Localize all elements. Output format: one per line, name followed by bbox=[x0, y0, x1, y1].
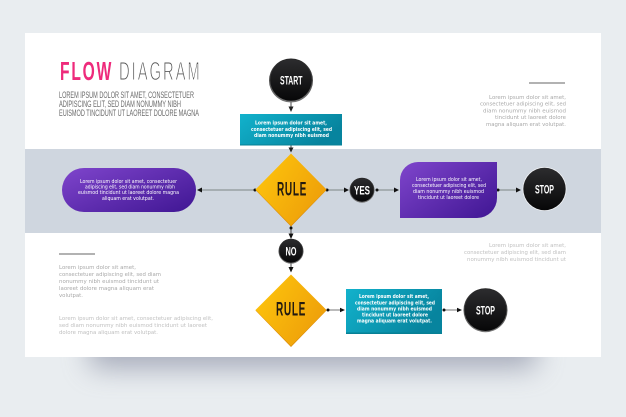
right top note bbox=[480, 82, 567, 128]
left lower note 2: sed diam nonummy nibh euismod tincidunt ut laoreet bbox=[59, 323, 208, 329]
left lower note 1: volutpat. bbox=[59, 293, 83, 299]
teal box top bbox=[240, 114, 342, 146]
arrow: yes to purple box bbox=[376, 188, 399, 192]
arrow: rule to no bbox=[288, 226, 294, 239]
purple box: tincidunt ut laoreet dolore bbox=[418, 195, 479, 201]
right top note: magna aliquam erat volutpat. bbox=[486, 122, 566, 128]
arrow: rule to yes bbox=[326, 188, 349, 192]
right lower note: consectetuer adipiscing elit, sed diam bbox=[464, 250, 566, 256]
purple pill: adipiscing elit, sed diam nonummy nibh bbox=[85, 184, 175, 190]
purple box: diam nonummy nibh euismod bbox=[413, 189, 484, 195]
right top note: Lorem ipsum dolor sit amet, bbox=[489, 95, 566, 101]
left lower note 1 bbox=[59, 254, 161, 299]
stop node 2: STOP bbox=[476, 304, 495, 318]
purple box bbox=[400, 162, 497, 218]
rule diamond 2: RULE bbox=[276, 300, 306, 320]
left lower note 2: dolore magna aliquam erat volutpat. bbox=[59, 330, 158, 336]
left lower note 1: consectetuer adipiscing elit, sed diam bbox=[59, 272, 161, 278]
left lower note 1: Lorem ipsum dolor sit amet, bbox=[59, 265, 136, 271]
right top note: diam nonummy nibh euismod bbox=[483, 108, 566, 114]
stop node 1 bbox=[522, 167, 566, 211]
right lower note: Lorem ipsum dolor sit amet, bbox=[489, 243, 566, 249]
title bbox=[60, 57, 202, 86]
rule diamond 1: RULE bbox=[277, 180, 307, 200]
arrow: rule 2 to teal box bbox=[326, 308, 345, 312]
teal box bottom: tincidunt ut laoreet dolore bbox=[362, 312, 428, 318]
rule diamond 1 bbox=[256, 154, 326, 226]
right lower note bbox=[464, 243, 567, 263]
left lower note 2 bbox=[59, 316, 213, 336]
subtitle text: LOREM IPSUM DOLOR SIT AMET, CONSECTETUER bbox=[59, 90, 194, 100]
teal box bottom bbox=[346, 289, 442, 334]
teal box top: Lorem ipsum dolor sit amet, bbox=[255, 120, 327, 126]
arrow: box to rule bbox=[288, 145, 294, 152]
start node bbox=[269, 58, 313, 102]
arrow: purple box to stop bbox=[496, 188, 521, 192]
subtitle text: ADIPISCING ELIT, SED DIAM NONUMMY NIBH bbox=[59, 99, 181, 109]
left lower note 2: Lorem ipsum dolor sit amet, consectetuer adipiscing elit, bbox=[59, 316, 213, 322]
grey band bbox=[25, 149, 601, 233]
arrow: rule to left pill bbox=[197, 188, 256, 192]
stop node 1: STOP bbox=[535, 182, 554, 196]
right lower note: nonummy nibh euismod tincidunt ut bbox=[467, 257, 567, 263]
teal box bottom: Lorem ipsum dolor sit amet, bbox=[359, 294, 429, 300]
title: FLOW bbox=[60, 57, 113, 86]
teal box bottom: diam nonummy nibh euismod bbox=[357, 306, 432, 312]
no node bbox=[278, 239, 304, 264]
arrow: teal box to stop bbox=[442, 308, 462, 312]
arrow: no to rule 2 bbox=[288, 262, 294, 272]
purple box: Lorem ipsum dolor sit amet, bbox=[416, 177, 482, 183]
start node: START bbox=[280, 74, 303, 88]
purple pill bbox=[62, 168, 196, 212]
left lower note 1: nonummy nibh euismod tincidunt ut bbox=[59, 279, 160, 285]
purple pill: Lorem ipsum dolor sit amet, consectetuer bbox=[80, 179, 178, 185]
yes node: YES bbox=[354, 183, 370, 197]
teal box top: consectetuer adipiscing elit, sed bbox=[251, 127, 332, 133]
card shadow bbox=[90, 320, 536, 368]
purple box: consectetuer adipiscing elit, sed bbox=[412, 183, 486, 189]
purple pill: euismod tincidunt ut laoreet dolore magna bbox=[78, 190, 179, 196]
teal box top: diam nonummy nibh euismod bbox=[254, 133, 329, 139]
rule diamond 2 bbox=[256, 274, 326, 347]
subtitle text bbox=[59, 90, 199, 118]
subtitle text: EUISMOD TINCIDUNT UT LAOREET DOLORE MAGNA bbox=[59, 108, 199, 118]
white card bbox=[25, 33, 601, 357]
stop node 2 bbox=[464, 288, 508, 332]
purple pill: aliquam erat volutpat. bbox=[102, 196, 154, 202]
title: DIAGRAM bbox=[119, 58, 202, 86]
teal box bottom: consectetuer adipiscing elit, sed bbox=[355, 300, 435, 306]
teal box bottom: magna aliquam erat volutpat. bbox=[357, 318, 432, 324]
left lower note 1: laoreet dolore magna aliquam erat bbox=[59, 286, 155, 292]
yes node bbox=[350, 178, 374, 203]
arrow: start to box bbox=[288, 102, 294, 112]
right top note: tincidunt ut laoreet dolore bbox=[495, 115, 567, 121]
no node: NO bbox=[286, 244, 296, 258]
right top note: consectetuer adipiscing elit, sed bbox=[480, 102, 566, 108]
